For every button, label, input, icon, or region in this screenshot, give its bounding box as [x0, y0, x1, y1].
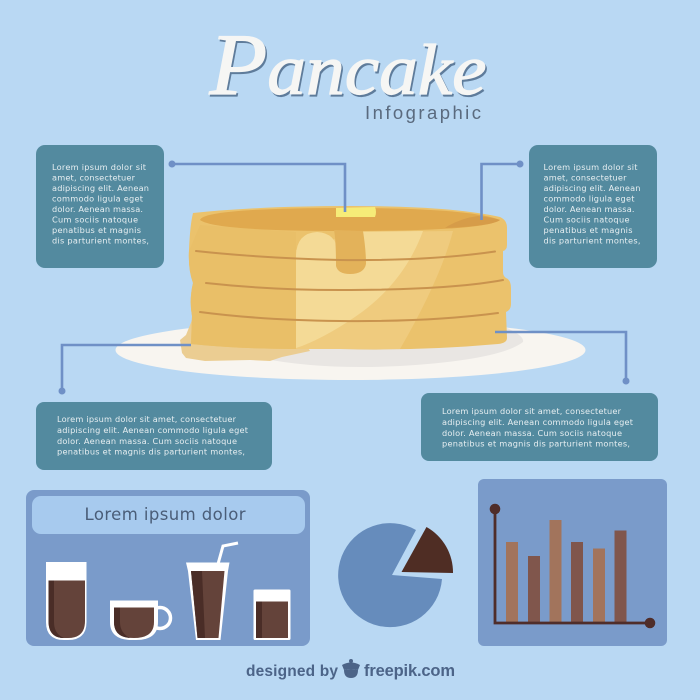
illustration: pancake stack [189, 206, 511, 349]
title: Pancake [208, 17, 486, 114]
text panel: top right: dis parturient montes, [544, 236, 640, 246]
illustration: plate [116, 320, 586, 380]
text panel: top left: amet, consectetuer [52, 172, 136, 182]
text panel: lower right: adipiscing elit. Aenean commodo ligula eget [442, 417, 634, 427]
text panel: top left: adipiscing elit. Aenean [52, 183, 149, 193]
subtitle: Infographic [365, 102, 481, 123]
title: Pancake [210, 19, 488, 116]
text panel: top right: Cum sociis natoque [544, 214, 630, 224]
icon: cup [110, 600, 170, 640]
illustration: outer highlight [296, 231, 453, 349]
text panel: top right [529, 145, 657, 268]
text panel: top right: amet, consectetuer [544, 172, 627, 182]
axes [490, 504, 655, 628]
pie slice [402, 527, 453, 573]
connector: lower left [58, 345, 191, 394]
text panel: top left: commodo ligula eget [52, 194, 144, 204]
icon: short glass [254, 590, 290, 640]
illustration: inner highlight [296, 231, 423, 348]
icon: tall glass [46, 562, 86, 640]
drinks heading: Lorem ipsum dolor [84, 505, 246, 524]
text panel: top right: penatibus et magnis [544, 225, 632, 235]
bars [506, 520, 626, 622]
text panel: top right: commodo ligula eget [544, 194, 635, 204]
icon: cup with straw [186, 543, 238, 640]
illustration: pancake top surface [200, 208, 500, 231]
text panel: top left: dis parturient montes, [52, 236, 149, 246]
panel: drinks [26, 490, 310, 646]
text panel: top right: Lorem ipsum dolor sit [544, 162, 638, 172]
illustration: pancake separators [196, 251, 503, 321]
text panel: lower right: Lorem ipsum dolor sit amet, consectetuer [442, 406, 622, 416]
panel: bar chart [478, 479, 667, 646]
text panel: lower right: dolor. Aenean massa. Cum sociis natoque [442, 428, 622, 438]
text panel: lower right: penatibus et magnis dis parturient montes, [442, 438, 630, 448]
text panel: lower left [36, 402, 272, 470]
footer credit: designed by [246, 663, 338, 680]
text panel: lower left: penatibus et magnis dis parturient montes, [57, 446, 245, 456]
text panel: lower right [421, 393, 658, 461]
illustration: syrup puddle [180, 320, 310, 361]
text panel: top left: Cum sociis natoque [52, 214, 138, 224]
text panel: lower left: adipiscing elit. Aenean commodo ligula eget [57, 425, 249, 435]
text panel: top left: penatibus et magnis [52, 225, 141, 235]
text panel: top left: Lorem ipsum dolor sit [52, 162, 147, 172]
text panel: top left [36, 145, 164, 268]
text panel: top right: adipiscing elit. Aenean [544, 183, 640, 193]
pie chart [338, 523, 453, 627]
connector: top left [168, 160, 345, 212]
illustration: butter drip [334, 230, 366, 274]
footer credit [246, 659, 455, 680]
illustration: butter [336, 207, 376, 217]
connector: lower right [495, 332, 630, 384]
text panel: top left: dolor. Aenean massa. [52, 204, 143, 214]
connector: top right [482, 160, 524, 220]
drinks heading [32, 496, 305, 534]
footer credit: freepik.com [364, 662, 455, 680]
text panel: top right: dolor. Aenean massa. [544, 204, 634, 214]
text panel: lower left: Lorem ipsum dolor sit amet, consectetuer [57, 414, 237, 424]
icon: freepik logo [342, 659, 360, 678]
text panel: lower left: dolor. Aenean massa. Cum sociis natoque [57, 436, 237, 446]
